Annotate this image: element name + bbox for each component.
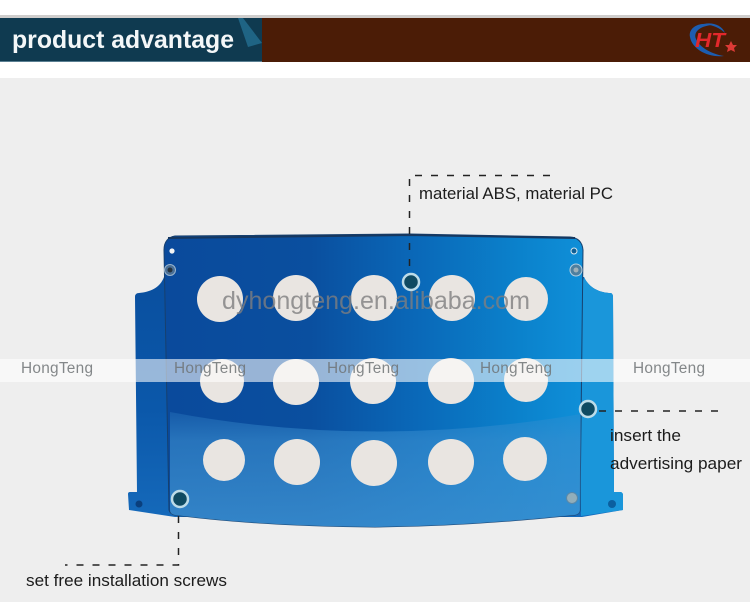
callout: installation screws bbox=[26, 491, 227, 590]
watermark band: HongTeng bbox=[21, 360, 93, 377]
callout: advertising paper: insert the bbox=[610, 427, 681, 445]
front cover bbox=[164, 234, 583, 527]
watermark band bbox=[0, 359, 750, 382]
top-edge highlight bbox=[168, 235, 575, 238]
icon: HT logo: HT bbox=[695, 30, 727, 52]
watermark: site address: dyhongteng.en.alibaba.com bbox=[222, 287, 530, 315]
right wing bbox=[578, 277, 623, 516]
callout: advertising paper: advertising paper bbox=[610, 455, 743, 473]
callout: material: material ABS, material PC bbox=[419, 185, 613, 203]
callout: material bbox=[403, 176, 613, 290]
watermark band: HongTeng bbox=[633, 360, 705, 377]
cut-out holes bbox=[197, 275, 548, 486]
watermark band: HongTeng bbox=[174, 360, 246, 377]
callout: installation screws: set free installation screws bbox=[26, 572, 227, 590]
corner holes and screws bbox=[169, 248, 175, 254]
heading: product advantage: product advantage bbox=[12, 26, 234, 54]
watermark band: HongTeng bbox=[327, 360, 399, 377]
callout: advertising paper bbox=[580, 401, 743, 473]
screw holes in tabs bbox=[136, 500, 142, 508]
header banner bbox=[0, 15, 750, 62]
icon: HT logo bbox=[690, 23, 737, 56]
back plate with side wings bbox=[128, 277, 623, 517]
product: blue advertising panel bbox=[128, 234, 623, 527]
lighter lower reflection bbox=[170, 412, 581, 527]
watermark band: HongTeng bbox=[480, 360, 552, 377]
